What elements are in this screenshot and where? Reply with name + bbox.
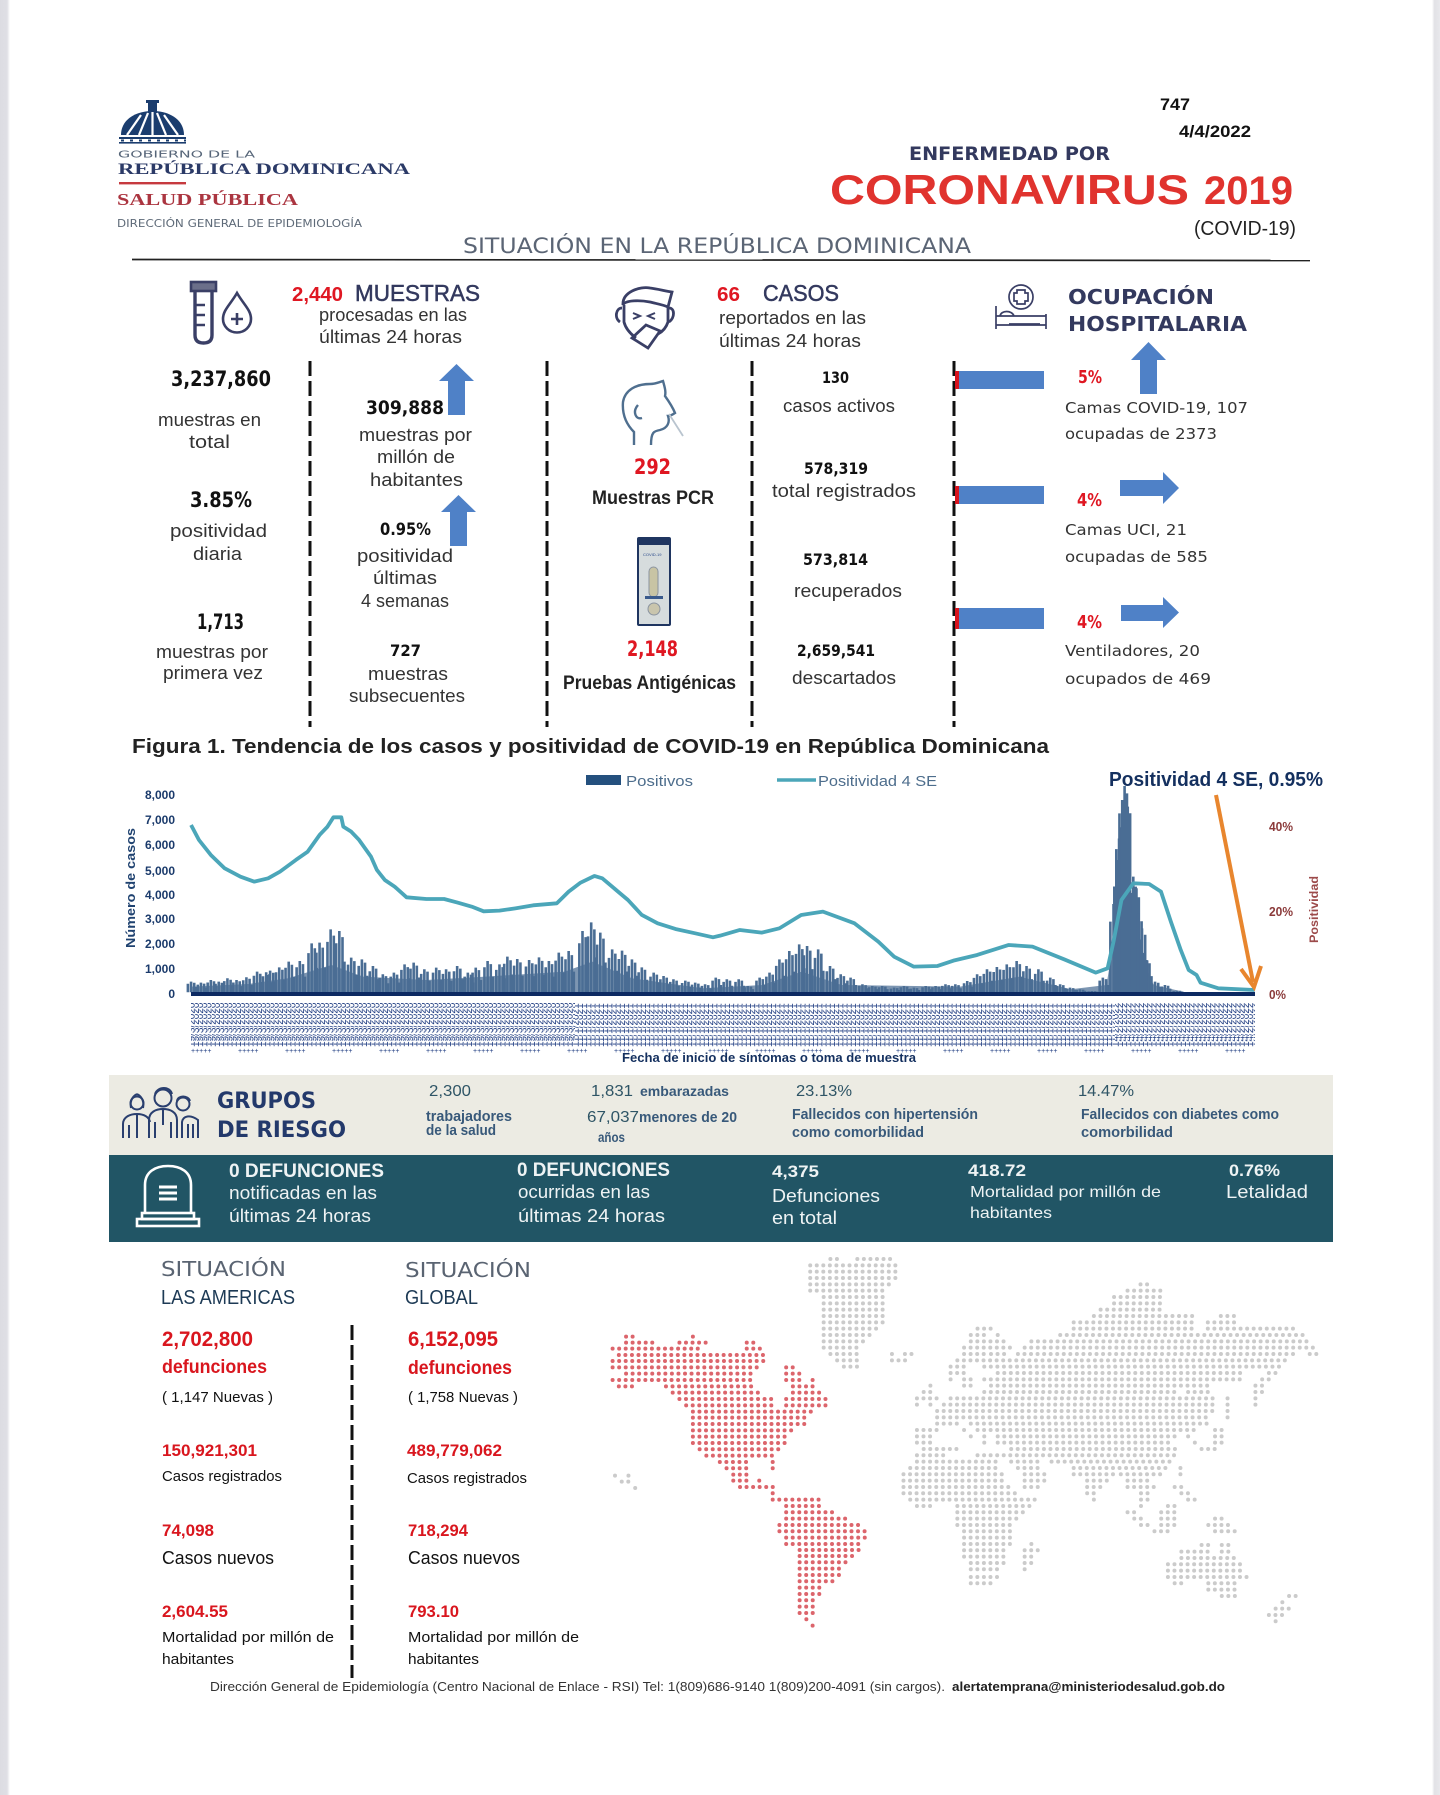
line: positividad 4 SE — [191, 817, 1255, 990]
stat: cases americas: 150,921,301 — [162, 1441, 257, 1460]
stat: mortality per million: 418.72 — [968, 1161, 1026, 1180]
stat: notified deaths: notificadas en las — [229, 1183, 377, 1203]
text: últimas 24 horas: últimas 24 horas — [719, 331, 861, 351]
legend: positivos — [586, 773, 693, 790]
stat: mortality americas: habitantes — [162, 1651, 234, 1668]
stat: samples per million: habitantes — [370, 470, 463, 490]
stat: new cases americas: 74,098 — [162, 1521, 214, 1540]
number: 292: 292 — [634, 455, 671, 479]
bar: ventilators — [955, 608, 1044, 629]
stat: health workers — [426, 1083, 512, 1139]
stat: notified deaths — [229, 1161, 384, 1226]
heading: muestras: MUESTRAS — [355, 280, 480, 306]
stat: four-week positivity: 0.95% — [380, 520, 431, 540]
stat: samples per million: 309,888 — [366, 397, 444, 419]
stat: cases global: 489,779,062 — [407, 1441, 502, 1460]
stat: total registered: total registrados — [772, 481, 916, 501]
stat: first-time samples — [156, 610, 268, 683]
value: 4% ventilators: 4% — [1077, 612, 1102, 633]
panel: PCR and antigen tests — [563, 381, 736, 694]
stat: mortality per million: Mortalidad por millón de — [970, 1184, 1161, 1201]
map: americas in red — [613, 1337, 866, 1626]
icon: hospital bed with cross — [996, 285, 1046, 329]
stat: deaths global: defunciones — [408, 1358, 512, 1379]
stat: health workers: de la salud — [426, 1122, 496, 1139]
header: government logo block — [117, 100, 411, 230]
stat: first-time samples: 1,713 — [197, 610, 244, 634]
stat: first-time samples: muestras por — [156, 642, 268, 662]
legend: positividad 4 SE: Positividad 4 SE — [818, 773, 937, 790]
label: ventilators: ocupados de 469 — [1065, 670, 1211, 688]
stat: subsequent samples — [349, 641, 465, 706]
stat: mortality global: Mortalidad por millón de — [408, 1629, 579, 1646]
stat: discarded: descartados — [792, 668, 896, 688]
stat: daily positivity: positividad — [170, 521, 267, 541]
stat: subsequent samples: muestras — [368, 664, 448, 684]
stat: diabetes — [1078, 1083, 1279, 1141]
stat: subsequent samples: 727 — [390, 641, 421, 660]
stat: active cases: 130 — [822, 368, 849, 387]
label: covid beds — [1065, 399, 1248, 443]
heading: ocupación: OCUPACIÓN — [1068, 285, 1214, 309]
stat: mortality americas: Mortalidad por millón de — [162, 1629, 334, 1646]
y axis: positivity ticks: 20% — [1269, 904, 1293, 919]
panel: situación las américas — [161, 1257, 334, 1668]
stat: diabetes: 14.47% — [1078, 1083, 1134, 1100]
icon: dome logo — [119, 100, 186, 144]
y axis: cases ticks — [145, 788, 175, 1001]
footer text: Dirección General de Epidemiología (Centro Nacional de Enlace - RSI) Tel: 1(809)686-9140 1(809)200-4091 (sin cargos). — [210, 1679, 945, 1694]
stat: mortality americas: 2,604.55 — [162, 1602, 228, 1621]
heading: grupos de riesgo — [217, 1089, 346, 1143]
y axis: cases ticks: 8,000 — [145, 788, 175, 802]
text: date: 4/4/2022 — [1179, 122, 1251, 141]
stat: hypertension: como comorbilidad — [792, 1124, 924, 1141]
stat: new cases americas: Casos nuevos — [162, 1548, 274, 1568]
stat: subsequent samples: subsecuentes — [349, 686, 465, 706]
stat: first-time samples: primera vez — [163, 663, 263, 683]
icon: antigen test cassette: COVID-19 — [643, 552, 662, 557]
map: dotted world map — [613, 1259, 1316, 1626]
panel: defunciones — [109, 1155, 1333, 1242]
label: ICU beds — [1065, 521, 1208, 566]
panel: muestras left column — [156, 367, 271, 683]
stat: samples per million: millón de — [377, 447, 455, 467]
stat: total samples — [158, 367, 271, 452]
stat: daily positivity: 3.85% — [190, 488, 252, 512]
label: muestras pcr: Muestras PCR — [592, 488, 714, 509]
heading: las américas: LAS AMERICAS — [161, 1287, 295, 1309]
y axis: cases ticks: 1,000 — [145, 962, 175, 976]
stat: four-week positivity: positividad — [357, 546, 453, 566]
label: ICU beds: ocupadas de 585 — [1065, 548, 1208, 566]
stat: new cases global: 718,294 — [408, 1521, 469, 1540]
stat: discarded: 2,659,541 — [797, 641, 875, 660]
stat: daily positivity — [170, 488, 267, 564]
x axis: date labels — [191, 1002, 1255, 1055]
stat: deaths americas — [162, 1328, 273, 1406]
title: covid-19: (COVID-19) — [1194, 218, 1296, 240]
stat: active cases — [783, 368, 895, 416]
stat: mortality global — [408, 1602, 579, 1668]
x axis title: Fecha de inicio de síntomas o toma de muestra — [622, 1050, 917, 1065]
heading: figura 1: Figura 1. Tendencia de los casos y positividad de COVID-19 en República Dominicana — [132, 736, 1050, 758]
stat: total deaths: 4,375 — [772, 1162, 819, 1181]
panel: muestras header — [191, 280, 480, 347]
stat: total deaths: Defunciones — [772, 1186, 880, 1206]
text: gobierno de la: GOBIERNO DE LA — [118, 150, 255, 160]
stat: daily positivity: diaria — [193, 544, 243, 564]
stat: lethality — [1226, 1161, 1308, 1202]
bars: positive cases — [188, 786, 1185, 992]
stat: cases americas — [162, 1441, 282, 1485]
stat: four-week positivity — [357, 520, 453, 611]
text: reportados: reportados en las — [719, 308, 866, 328]
arrow: right ventilators — [1121, 597, 1179, 628]
text: bulletin number: 747 — [1160, 95, 1190, 114]
stat: hypertension: 23.13% — [796, 1083, 852, 1100]
panel: situación global — [405, 1258, 579, 1668]
stat: cases americas: Casos registrados — [162, 1468, 282, 1485]
label: pruebas antigénicas: Pruebas Antigénicas — [563, 673, 736, 694]
title block — [830, 143, 1296, 240]
header: bulletin number and date — [1160, 95, 1251, 141]
stat: mortality americas — [162, 1602, 334, 1668]
stat: samples per million: muestras por — [359, 425, 472, 445]
icon: face with mask — [616, 288, 674, 348]
stat: hypertension: Fallecidos con hipertensión — [792, 1106, 978, 1123]
stat: new cases americas — [162, 1521, 274, 1568]
stat: new cases global: Casos nuevos — [408, 1548, 520, 1568]
stat: lethality: 0.76% — [1229, 1161, 1280, 1180]
arrow: up positivity — [441, 495, 476, 546]
callout: positividad 0.95%: Positividad 4 SE, 0.95% — [1109, 769, 1323, 791]
y axis: cases ticks: 7,000 — [145, 813, 175, 827]
legend: positivos: Positivos — [626, 773, 693, 790]
title: enfermedad por: ENFERMEDAD POR — [909, 143, 1110, 165]
title: coronavirus: CORONAVIRUS — [830, 166, 1189, 213]
stat: cases global — [407, 1441, 527, 1487]
stat: diabetes: comorbilidad — [1081, 1124, 1173, 1141]
title: 2019: 2019 — [1204, 169, 1293, 213]
bar: ICU beds — [955, 486, 1044, 504]
label: covid beds: ocupadas de 2373 — [1065, 425, 1217, 443]
stat: total registered — [772, 459, 916, 501]
text: dirección general: DIRECCIÓN GENERAL DE EPIDEMIOLOGÍA — [117, 217, 363, 230]
stat: pregnant and minors — [587, 1083, 737, 1145]
stat: pregnant and minors: 67,037 — [587, 1109, 639, 1126]
stat: deaths global: ( 1,758 Nuevas ) — [408, 1389, 518, 1406]
y axis: positivity ticks — [1269, 819, 1293, 1002]
panel: casos header — [616, 280, 866, 351]
stat: four-week positivity: últimas — [373, 568, 437, 588]
heading: hospitalaria: HOSPITALARIA — [1068, 312, 1248, 336]
stat: pregnant and minors: embarazadas — [640, 1083, 729, 1099]
label: ventilators — [1065, 642, 1211, 688]
icon: test tube and blood drop — [191, 282, 251, 343]
stat: four-week positivity: 4 semanas — [361, 591, 449, 611]
panel: muestras second column — [349, 364, 476, 706]
arrow: right ICU — [1120, 472, 1179, 504]
icon: antigen test cassette — [637, 537, 671, 626]
stat: total samples: 3,237,860 — [171, 367, 271, 391]
panel: casos stats — [772, 368, 916, 688]
y axis: cases ticks: 2,000 — [145, 937, 175, 951]
stat: deaths global — [408, 1328, 518, 1406]
stat: total samples: muestras en — [158, 410, 261, 430]
heading: global: GLOBAL — [405, 1287, 478, 1309]
stat: occurred deaths — [517, 1160, 670, 1226]
stat: recovered: 573,814 — [803, 550, 868, 569]
heading: situación: SITUACIÓN — [405, 1258, 531, 1282]
stat: cases global: Casos registrados — [407, 1470, 527, 1487]
stat: occurred deaths: últimas 24 horas — [518, 1206, 665, 1226]
number: 2,148: 2,148 — [627, 637, 678, 661]
number: 2,440: 2,440 — [292, 284, 343, 306]
heading: grupos de riesgo: GRUPOS — [217, 1089, 316, 1114]
footer email: alertatemprana@ministeriodesalud.gob.do — [952, 1679, 1225, 1694]
stat: notified deaths: 0 DEFUNCIONES — [229, 1161, 384, 1182]
stat: recovered — [794, 550, 902, 601]
bar: covid beds — [955, 371, 1044, 389]
stat: total registered: 578,319 — [804, 459, 868, 478]
y axis: cases ticks: 5,000 — [145, 864, 175, 878]
stat: deaths americas: ( 1,147 Nuevas ) — [162, 1389, 273, 1406]
text: procesadas: procesadas en las — [319, 305, 467, 325]
stat: diabetes: Fallecidos con diabetes como — [1081, 1106, 1279, 1123]
y axis: cases ticks: 3,000 — [145, 912, 175, 926]
stat: notified deaths: últimas 24 horas — [229, 1206, 371, 1226]
stat: discarded — [792, 641, 896, 688]
stat: mortality global: 793.10 — [408, 1602, 459, 1621]
label: covid beds: Camas COVID-19, 107 — [1065, 399, 1248, 417]
stat: total samples: total — [189, 432, 230, 452]
red rule — [119, 182, 186, 184]
text: república dominicana: REPÚBLICA DOMINICANA — [118, 161, 411, 178]
icon: group of people — [123, 1088, 198, 1138]
arrow: orange pointer — [1216, 795, 1261, 987]
heading: grupos de riesgo: DE RIESGO — [217, 1118, 346, 1143]
stat: pregnant and minors: 1,831 — [591, 1083, 633, 1100]
stat: lethality: Letalidad — [1226, 1182, 1308, 1202]
stat: health workers: 2,300 — [429, 1083, 471, 1100]
arrow: up covid beds — [1131, 342, 1166, 394]
stat: deaths global: 6,152,095 — [408, 1328, 498, 1351]
panel: grupos de riesgo — [109, 1075, 1333, 1155]
column dividers — [310, 361, 954, 727]
icon: nasal swab profile — [623, 381, 683, 445]
number: 66: 66 — [717, 284, 740, 306]
y axis: cases ticks: 6,000 — [145, 838, 175, 852]
chart: casos y positividad — [123, 769, 1323, 1065]
stat: deaths americas: 2,702,800 — [162, 1328, 253, 1351]
heading: casos: CASOS — [763, 280, 839, 306]
value: 4% ICU: 4% — [1077, 490, 1102, 511]
stat: pregnant and minors: menores de 20 — [639, 1109, 737, 1126]
y axis: cases ticks: 0 — [168, 987, 175, 1001]
stat: pregnant and minors: años — [598, 1129, 625, 1145]
panel: ocupación hospitalaria — [955, 285, 1248, 688]
footer contact line — [210, 1679, 1225, 1694]
stat: hypertension — [792, 1083, 978, 1141]
y axis title: Número de casos — [123, 828, 138, 948]
subtitle text: SITUACIÓN EN LA REPÚBLICA DOMINICANA — [463, 233, 971, 259]
text: últimas 24 horas: últimas 24 horas — [319, 327, 462, 347]
heading: situación: SITUACIÓN — [161, 1257, 286, 1281]
label: ICU beds: Camas UCI, 21 — [1065, 521, 1187, 539]
y axis: positivity ticks: 0% — [1269, 987, 1286, 1002]
stat: recovered: recuperados — [794, 581, 902, 601]
stat: total deaths — [772, 1162, 880, 1228]
y axis title: positividad: Positividad — [1307, 876, 1321, 943]
icon: tombstone — [137, 1166, 199, 1226]
stat: mortality per million: habitantes — [970, 1205, 1052, 1222]
stat: occurred deaths: ocurridas en las — [518, 1182, 650, 1202]
y axis: cases ticks: 4,000 — [145, 888, 175, 902]
map: rest of world in grey — [615, 1259, 1316, 1621]
stat: mortality global: habitantes — [408, 1651, 479, 1668]
stat: total deaths: en total — [772, 1208, 837, 1228]
text: salud pública: SALUD PÚBLICA — [117, 190, 299, 209]
stat: new cases global — [408, 1521, 520, 1568]
stat: active cases: casos activos — [783, 396, 895, 416]
stat: mortality per million — [968, 1161, 1161, 1222]
stat: samples per million — [359, 397, 472, 490]
stat: deaths americas: defunciones — [162, 1357, 267, 1378]
axis baseline — [191, 992, 1255, 996]
stat: health workers: trabajadores — [426, 1108, 512, 1125]
stat: occurred deaths: 0 DEFUNCIONES — [517, 1160, 670, 1181]
value: 5%: 5% — [1078, 367, 1102, 388]
y axis: positivity ticks: 40% — [1269, 819, 1293, 834]
arrow: up samples per million — [439, 364, 474, 415]
label: ventilators: Ventiladores, 20 — [1065, 642, 1200, 660]
